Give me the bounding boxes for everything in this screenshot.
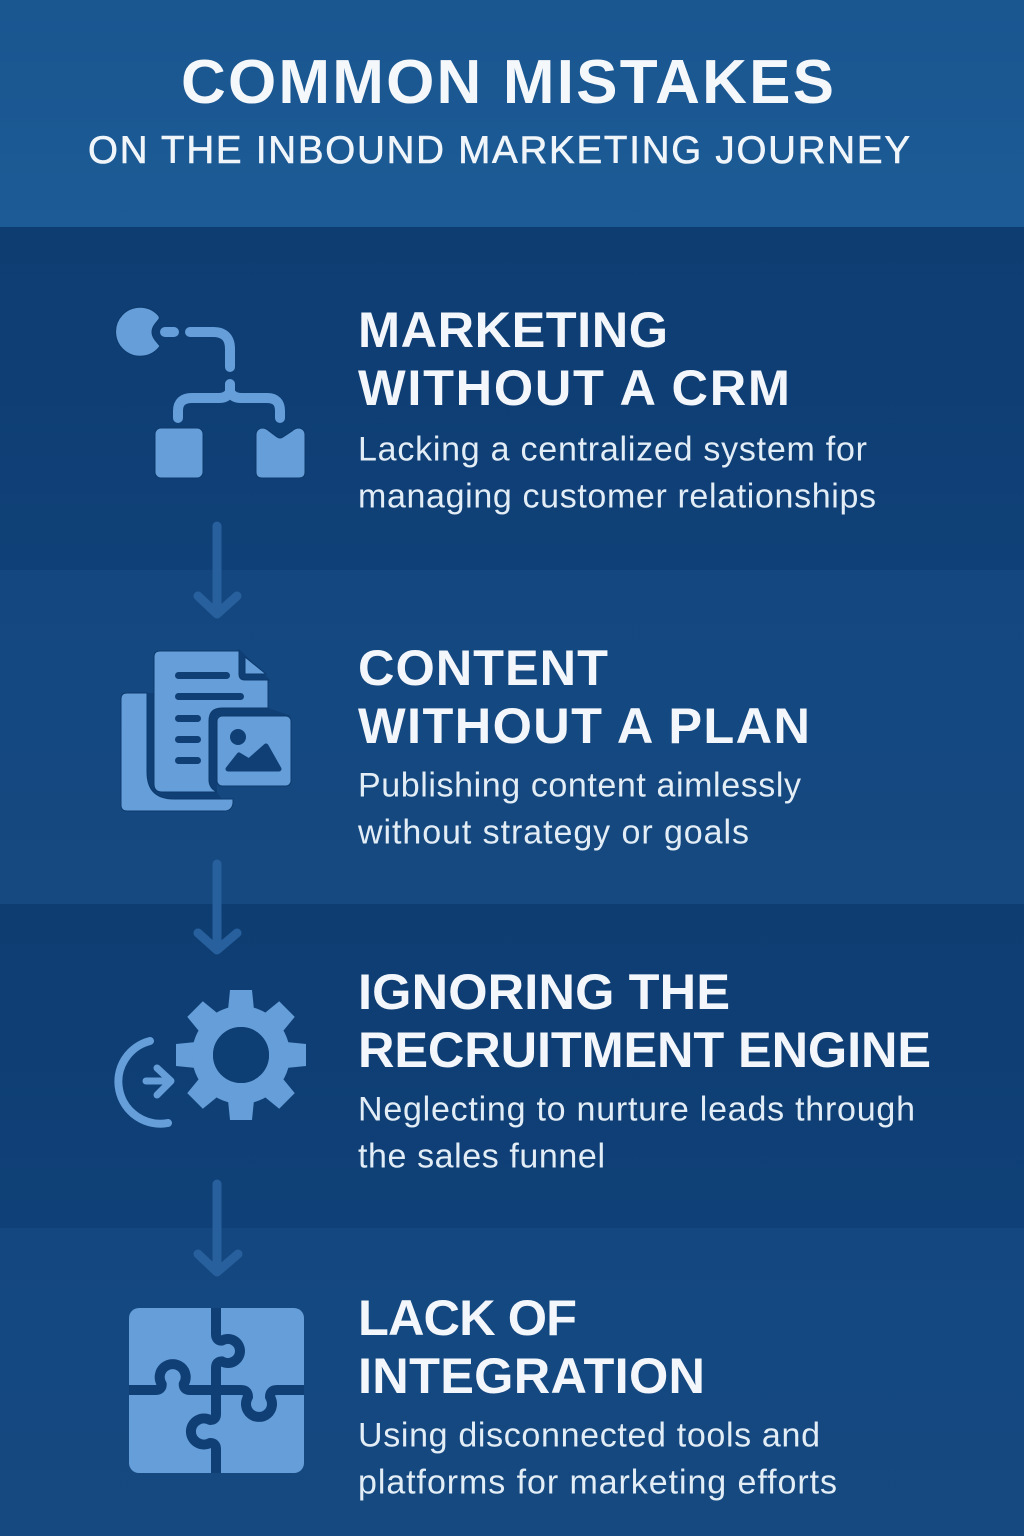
heading: MARKETING — [358, 301, 668, 358]
heading: INTEGRATION — [358, 1347, 705, 1404]
heading: WITHOUT A CRM — [358, 359, 790, 416]
subtitle: ON THE INBOUND MARKETING JOURNEY — [88, 129, 910, 172]
heading — [358, 301, 790, 416]
icon: gear with return arrow — [118, 990, 306, 1124]
heading: IGNORING THE — [358, 963, 730, 1020]
description — [358, 1090, 915, 1176]
description — [358, 1416, 837, 1502]
description: platforms for marketing efforts — [358, 1464, 837, 1502]
arrow: step 3 to 4 — [198, 1184, 238, 1272]
header panel — [0, 0, 1024, 227]
arrow: step 1 to 2 — [198, 526, 237, 614]
description: without strategy or goals — [357, 814, 749, 852]
heading — [358, 1289, 705, 1404]
heading: RECRUITMENT ENGINE — [358, 1021, 931, 1078]
description: Neglecting to nurture leads through — [358, 1090, 915, 1128]
title: COMMON MISTAKES — [181, 48, 834, 117]
panel: ignoring the recruitment engine — [0, 904, 1024, 1228]
panel: lack of integration — [0, 1228, 1024, 1536]
heading — [358, 963, 931, 1078]
description — [358, 430, 876, 516]
description: Using disconnected tools and — [358, 1416, 820, 1454]
heading — [358, 639, 810, 754]
heading: LACK OF — [358, 1289, 577, 1346]
panel: content without a plan — [0, 570, 1024, 904]
arrow: step 2 to 3 — [198, 864, 237, 950]
description — [357, 766, 801, 852]
icon: puzzle pieces — [129, 1308, 304, 1473]
description: Publishing content aimlessly — [358, 766, 801, 804]
icon: documents and image — [121, 651, 291, 811]
heading: WITHOUT A PLAN — [358, 697, 810, 754]
heading: CONTENT — [358, 639, 608, 696]
panel: marketing without a CRM — [0, 227, 1024, 570]
description: managing customer relationships — [358, 478, 876, 516]
icon: CRM flow diagram — [116, 307, 305, 478]
description: the sales funnel — [358, 1138, 605, 1176]
description: Lacking a centralized system for — [358, 430, 867, 468]
